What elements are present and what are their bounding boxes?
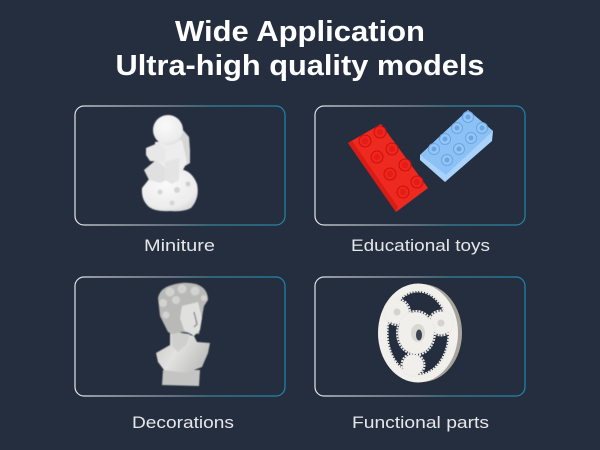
panel: educational toys <box>315 106 525 255</box>
icon: astronaut figurine <box>142 115 198 211</box>
icon: planet gear right <box>428 310 454 336</box>
icon: blue brick <box>420 110 493 182</box>
icon: planet gear bottom <box>402 354 424 376</box>
icon: sun gear <box>397 311 435 355</box>
title: Ultra-high quality models <box>116 50 484 82</box>
icon: bust of David <box>156 283 210 386</box>
panel: decorations <box>75 277 285 432</box>
icon: red brick <box>348 124 428 212</box>
label: Functional parts <box>352 413 489 432</box>
icon: planetary gear <box>378 284 462 382</box>
label: Decorations <box>132 413 234 432</box>
panel: functional parts <box>315 277 525 432</box>
icon: planet gear top <box>384 299 410 325</box>
label: Miniture <box>144 236 215 255</box>
panel: miniature <box>75 106 285 255</box>
title <box>116 16 484 82</box>
label: Educational toys <box>351 236 490 255</box>
title: Wide Application <box>175 16 425 48</box>
